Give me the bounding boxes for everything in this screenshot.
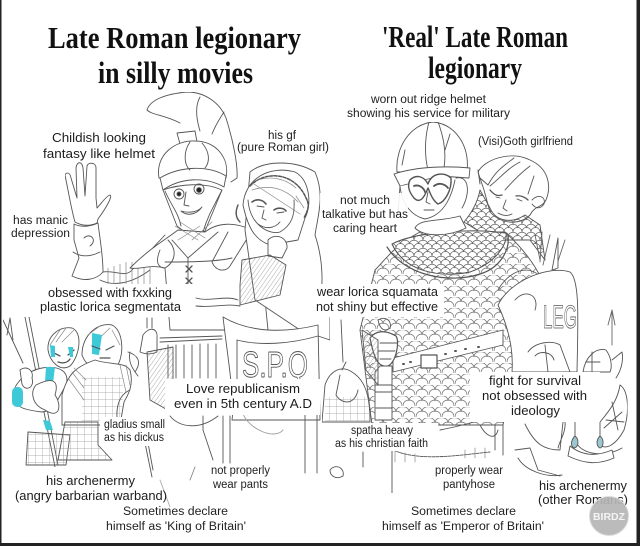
label: pants — [211, 465, 270, 491]
illustration: angry barbarian warband — [3, 317, 139, 467]
illustration: Roman girlfriend — [236, 163, 330, 340]
label: pantyhose — [435, 465, 503, 491]
label: fight for survival: not obsessed with — [482, 388, 587, 403]
label: Emperor of Britain: Sometimes declare — [411, 506, 516, 518]
illustration: real late Roman legionary — [322, 122, 627, 493]
label: republicanism — [165, 379, 320, 415]
label: other Romans archenemy: (other Romans) — [538, 492, 628, 507]
label: pants: not properly — [211, 465, 270, 477]
title: left: in silly movies — [98, 55, 253, 90]
illustration: chainmail and scale body — [360, 216, 550, 425]
background Roman soldier — [322, 320, 370, 422]
background Romans at right — [515, 310, 627, 476]
label: lorica segmentata — [36, 284, 195, 317]
label: caring heart: caring heart — [333, 223, 398, 235]
illustration: lower armour and pteruges — [140, 318, 317, 507]
label: caring heart — [320, 193, 408, 236]
belt and hand on spatha — [362, 318, 503, 420]
icon: raised hand and gauntlet — [65, 163, 165, 283]
label: gladius: gladius small — [104, 419, 165, 431]
title: right: legionary — [428, 50, 522, 85]
label: King of Britain: Sometimes declare — [123, 506, 228, 518]
label: ridge helmet — [347, 94, 510, 120]
illustration: shield with S.P.Q: S.P.Q — [242, 344, 308, 385]
label: fight for survival: fight for survival — [489, 373, 581, 388]
watermark: BIRDZ badge: BIRDZ — [593, 511, 626, 523]
label: girlfriend — [237, 130, 329, 154]
label: other Romans archenemy: his archenermy — [539, 478, 627, 493]
label: pantyhose: properly wear — [435, 465, 503, 477]
title: left — [48, 20, 301, 90]
label: manic depression: depression — [11, 228, 70, 240]
label: manic depression — [11, 215, 70, 240]
label: republicanism: Love republicanism — [186, 381, 300, 396]
illustration: legion shield — [498, 270, 578, 372]
label: spatha — [320, 423, 438, 451]
label: fight for survival — [470, 372, 600, 422]
label: spatha: as his christian faith — [335, 438, 428, 450]
label: pants: wear pants — [212, 479, 268, 491]
label: fight for survival: ideology — [511, 403, 560, 418]
label: lorica segmentata: plastic lorica segmentata — [40, 299, 182, 314]
sleeve hatching — [108, 258, 150, 284]
title: left: Late Roman legionary — [48, 20, 301, 55]
illustration: silly movie legionary — [65, 92, 330, 507]
label: girlfriend: (pure Roman girl) — [237, 142, 329, 154]
icon: crested plume — [147, 92, 237, 182]
label: gladius: as his dickus — [104, 432, 164, 444]
icon: fantasy helmet with smiling face — [158, 141, 227, 236]
torso and lorica segmentata — [130, 222, 268, 330]
label: ridge helmet: worn out ridge helmet — [370, 94, 487, 106]
label: ridge helmet: showing his service for military — [347, 108, 510, 120]
lower legs and hem — [330, 420, 503, 493]
label: republicanism: even in 5th century A.D — [174, 396, 312, 411]
label: lorica segmentata: obsessed with fxxking — [48, 285, 172, 300]
label: manic depression: has manic — [13, 215, 68, 227]
label: Emperor of Britain — [382, 506, 544, 533]
illustration: legion shield: LEG — [543, 299, 577, 335]
label: other Romans archenemy — [538, 478, 628, 507]
title: right: 'Real' Late Roman — [382, 19, 568, 54]
label: pantyhose: pantyhose — [443, 479, 495, 491]
watermark: BIRDZ badge — [590, 496, 628, 536]
label: girlfriend: his gf — [268, 130, 297, 142]
label: lorica squamata: wear lorica squamata — [316, 284, 439, 299]
label: spatha: spatha heavy — [351, 425, 413, 437]
label: Emperor of Britain: himself as 'Emperor of Britain' — [382, 521, 544, 533]
label: gladius — [100, 417, 168, 446]
label: helmet — [43, 130, 155, 161]
label: lorica squamata: not shiny but effective — [316, 299, 438, 314]
label: caring heart: talkative but has — [322, 209, 408, 221]
label: King of Britain — [106, 506, 246, 533]
illustration: Goth girlfriend — [464, 156, 565, 270]
spears — [3, 317, 58, 467]
label: barbarian archenemy — [15, 473, 167, 503]
icon: worn ridge helmet and face — [394, 122, 470, 219]
label: lorica squamata — [314, 284, 444, 317]
title: right — [382, 19, 568, 85]
label: helmet: fantasy like helmet — [43, 146, 155, 161]
label: King of Britain: himself as 'King of Britain' — [106, 521, 246, 533]
label: barbarian archenemy: his archenermy — [46, 473, 135, 488]
label: Goth girlfriend: (Visi)Goth girlfriend — [478, 136, 573, 148]
label: barbarian archenemy: (angry barbarian warband) — [15, 488, 167, 503]
label: caring heart: not much — [340, 195, 390, 207]
barbarian left — [12, 328, 79, 465]
label: helmet: Childish looking — [52, 130, 146, 145]
illustration: shield with S.P.Q — [223, 317, 320, 420]
barbarian right — [20, 325, 139, 460]
